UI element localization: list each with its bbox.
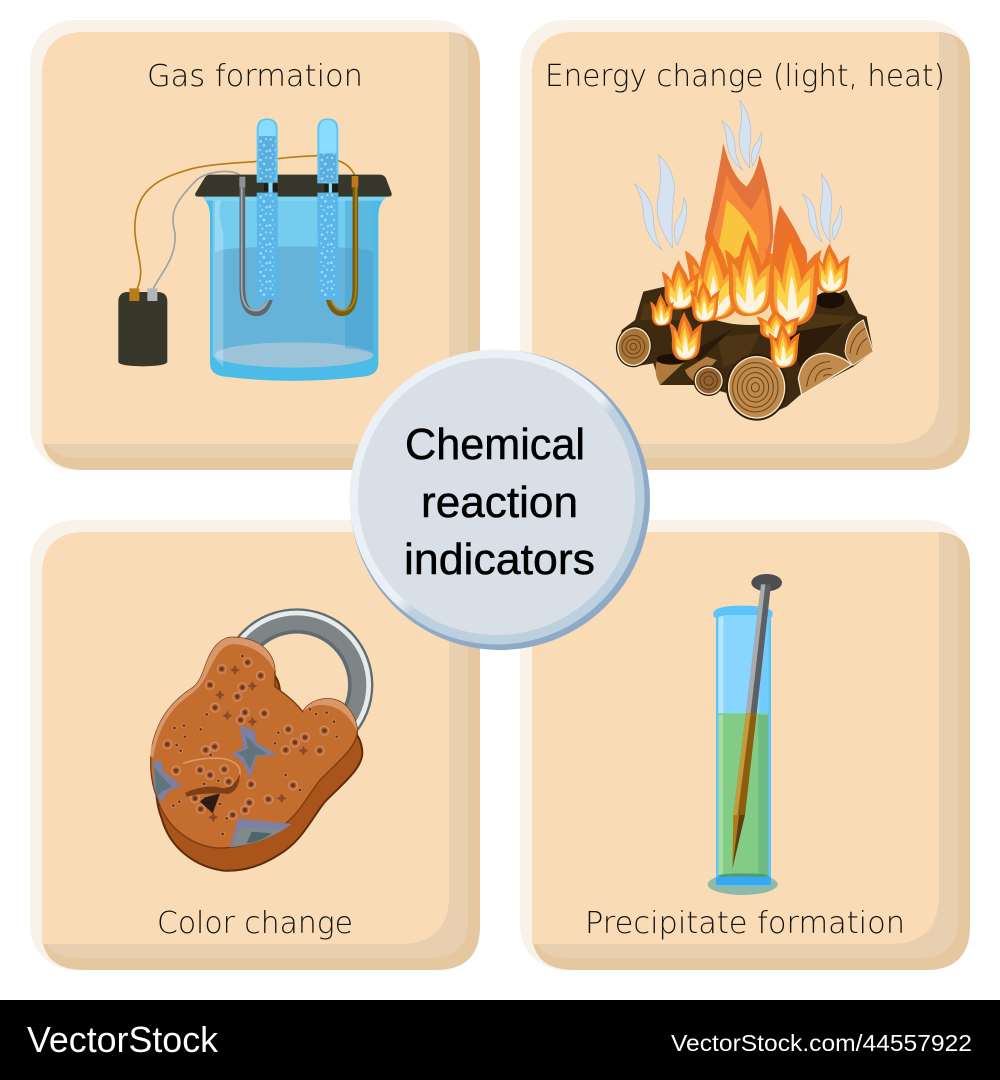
right electrode bbox=[327, 176, 358, 313]
badge title: reaction bbox=[421, 478, 578, 527]
badge title: indicators bbox=[404, 535, 595, 584]
heading: precipitate formation: Precipitate formation bbox=[585, 906, 905, 941]
lid bbox=[195, 175, 392, 197]
badge title: Chemical bbox=[405, 420, 585, 469]
lock side bbox=[156, 659, 362, 871]
left electrode bbox=[239, 177, 271, 313]
footer logo: VectorStock bbox=[27, 1019, 219, 1060]
center badge bbox=[350, 350, 650, 650]
panel: color change bbox=[30, 520, 480, 970]
lock face bbox=[151, 637, 357, 848]
steam wisps bbox=[634, 100, 842, 251]
badge face bbox=[358, 358, 635, 635]
left test tube with bubbles bbox=[255, 118, 280, 300]
heading: energy change: Energy change (light, heat) bbox=[545, 59, 945, 94]
panel: energy change bbox=[520, 20, 970, 470]
right test tube with bubbles bbox=[315, 118, 341, 300]
keyhole cover bbox=[183, 758, 240, 813]
shackle bbox=[221, 609, 372, 761]
illustration: graduated cylinder with nail bbox=[708, 574, 782, 895]
nail bbox=[732, 574, 782, 869]
main flames bbox=[685, 225, 822, 327]
logs bbox=[613, 285, 873, 421]
footer url: VectorStock.com/44557922 bbox=[671, 1030, 972, 1056]
wires bbox=[135, 156, 355, 288]
panel: precipitate formation bbox=[520, 520, 970, 970]
footer bar bbox=[0, 1000, 1000, 1080]
back flames bbox=[690, 143, 810, 325]
illustration: rusty padlock bbox=[150, 609, 372, 871]
badge rim bbox=[350, 350, 644, 644]
cylinder glass bbox=[713, 606, 773, 886]
panel: gas formation bbox=[30, 20, 480, 470]
badge base bbox=[350, 350, 650, 650]
heading: gas formation: Gas formation bbox=[147, 59, 363, 94]
illustration: electrolysis beaker and battery bbox=[118, 118, 392, 381]
illustration: campfire bbox=[613, 100, 873, 421]
beaker body bbox=[202, 196, 387, 381]
cylinder base bbox=[708, 874, 778, 895]
battery bbox=[118, 288, 167, 366]
exposed metal patches bbox=[153, 725, 292, 847]
small flames bbox=[650, 243, 850, 368]
heading: color change: Color change bbox=[157, 906, 353, 941]
rust spots bbox=[162, 654, 339, 836]
face highlight bbox=[150, 637, 357, 757]
